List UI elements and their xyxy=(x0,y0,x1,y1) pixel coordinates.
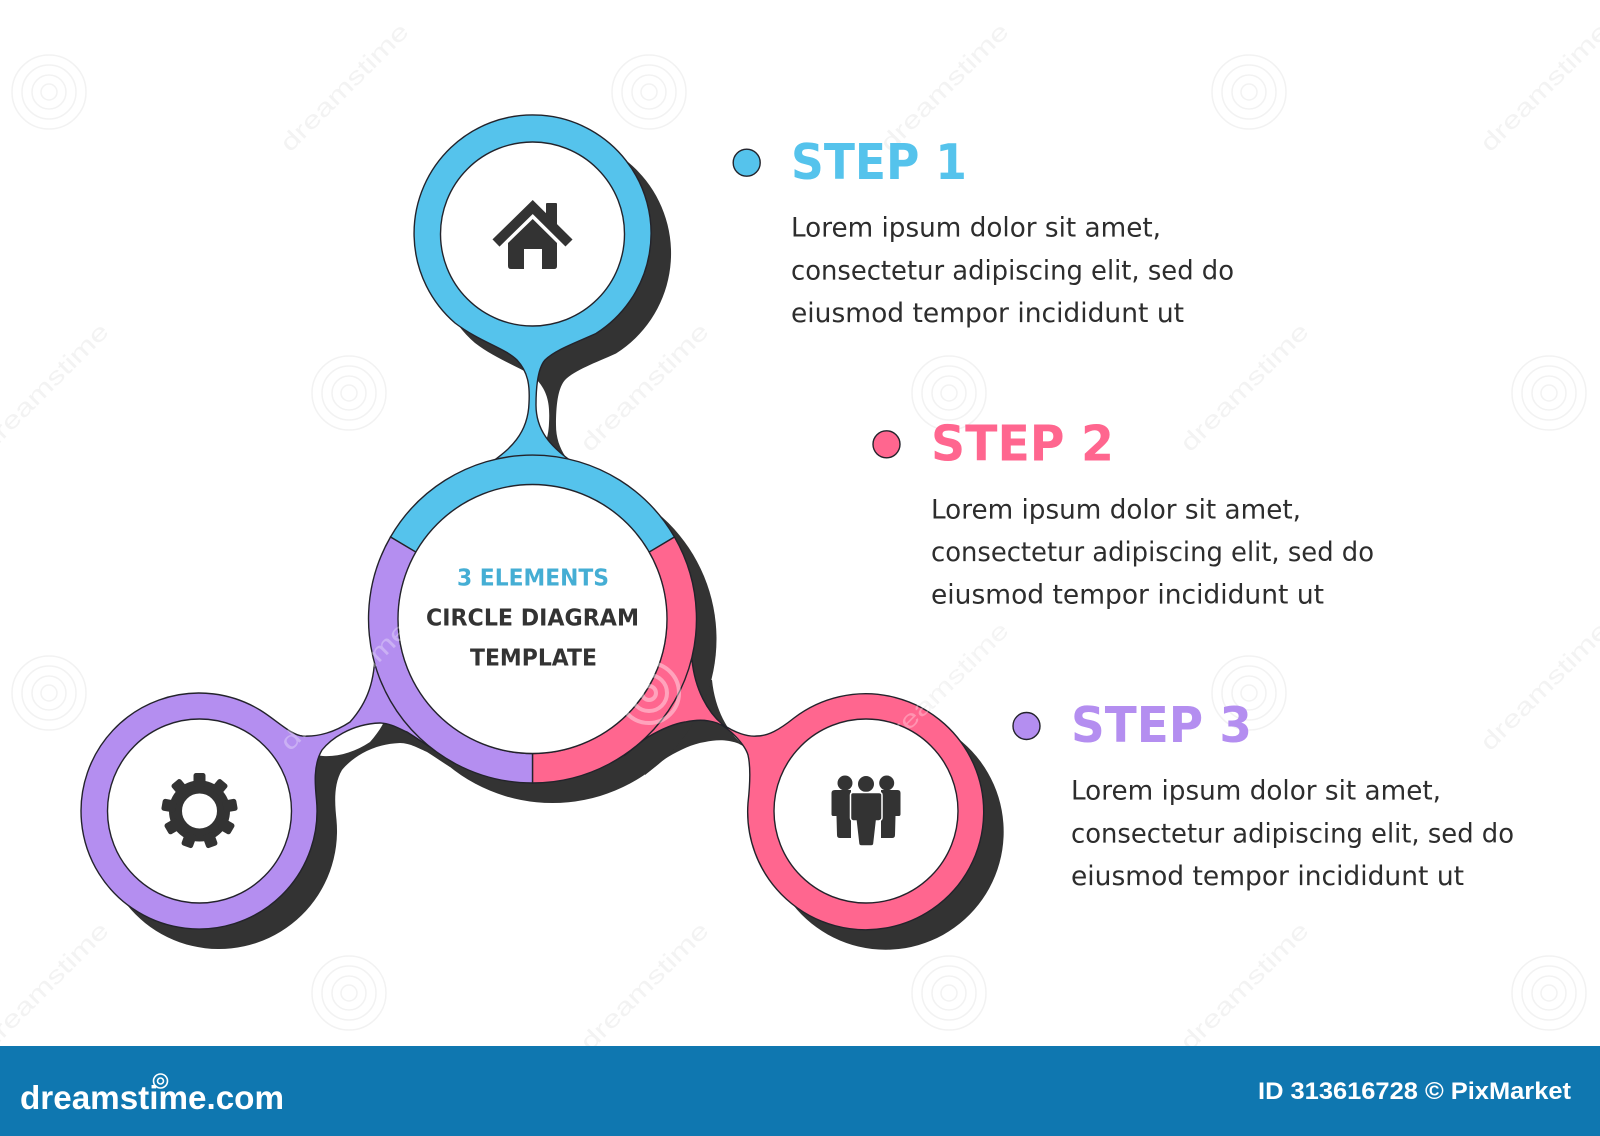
watermark pattern: dreamstime xyxy=(1175,917,1314,1056)
bullet xyxy=(1013,712,1040,740)
watermark pattern: dreamstime xyxy=(575,318,714,457)
body text xyxy=(931,494,1374,611)
ring segment pink xyxy=(532,537,696,783)
icon: house xyxy=(496,203,569,269)
watermark pattern: dreamstime xyxy=(575,917,714,1056)
center title: 3 ELEMENTS xyxy=(457,564,609,592)
body text: consectetur adipiscing elit, sed do xyxy=(1071,818,1514,850)
center title xyxy=(426,564,639,672)
watermark pattern: dreamstime xyxy=(875,617,1014,756)
body text: eiusmod tempor incididunt ut xyxy=(931,580,1324,611)
step 3 white disc xyxy=(108,719,292,903)
body text: consectetur adipiscing elit, sed do xyxy=(791,256,1234,286)
body text: eiusmod tempor incididunt ut xyxy=(1071,861,1464,892)
step 1 block xyxy=(733,134,1234,329)
ring segment purple xyxy=(369,537,532,783)
center title: CIRCLE DIAGRAM xyxy=(426,604,639,632)
step 3 block xyxy=(1013,697,1514,892)
central ring xyxy=(369,455,696,783)
ring segment blue xyxy=(390,455,674,552)
body text xyxy=(1071,776,1514,892)
step 2 white disc xyxy=(774,719,958,903)
body text: eiusmod tempor incididunt ut xyxy=(791,298,1184,329)
watermark text over diagram: dreamstime xyxy=(275,617,414,756)
footer logo mark xyxy=(154,1074,168,1088)
body text xyxy=(791,213,1234,329)
bullet xyxy=(733,149,760,176)
watermark pattern: dreamstime xyxy=(1175,318,1314,457)
icon: gear xyxy=(161,773,238,849)
icon: people xyxy=(832,776,900,846)
heading: STEP 1 xyxy=(791,134,967,191)
body text: consectetur adipiscing elit, sed do xyxy=(931,537,1374,568)
footer logo: dreamstime.com xyxy=(20,1079,284,1116)
center white disc xyxy=(398,484,667,754)
circle diagram xyxy=(81,115,1004,950)
connector and circle: step 1 blue xyxy=(414,115,651,480)
connector and circle: step 3 purple xyxy=(81,650,450,929)
watermark pattern: dreamstime xyxy=(1475,617,1600,756)
watermark pattern: dreamstime xyxy=(275,18,414,157)
diagram drop shadow xyxy=(101,135,1004,950)
connector and circle: step 2 pink xyxy=(620,650,984,930)
footer credit: ID 313616728 © PixMarket xyxy=(1258,1078,1571,1105)
ring watermark swirl xyxy=(619,663,679,723)
step 2 block xyxy=(873,416,1374,611)
body text: Lorem ipsum dolor sit amet, xyxy=(931,494,1301,525)
watermark text over diagram: dreamstime xyxy=(873,617,1012,756)
watermark pattern: dreamstime xyxy=(875,18,1014,157)
footer bar xyxy=(0,1046,1600,1136)
body text: Lorem ipsum dolor sit amet, xyxy=(1071,776,1441,807)
heading: STEP 2 xyxy=(931,416,1114,473)
heading: STEP 3 xyxy=(1071,697,1252,754)
center title: TEMPLATE xyxy=(470,644,597,672)
bullet xyxy=(873,431,900,458)
watermark pattern: dreamstime xyxy=(1475,18,1600,157)
step 1 white disc xyxy=(440,142,624,326)
body text: Lorem ipsum dolor sit amet, xyxy=(791,213,1161,244)
watermark text over diagram xyxy=(275,617,1012,756)
